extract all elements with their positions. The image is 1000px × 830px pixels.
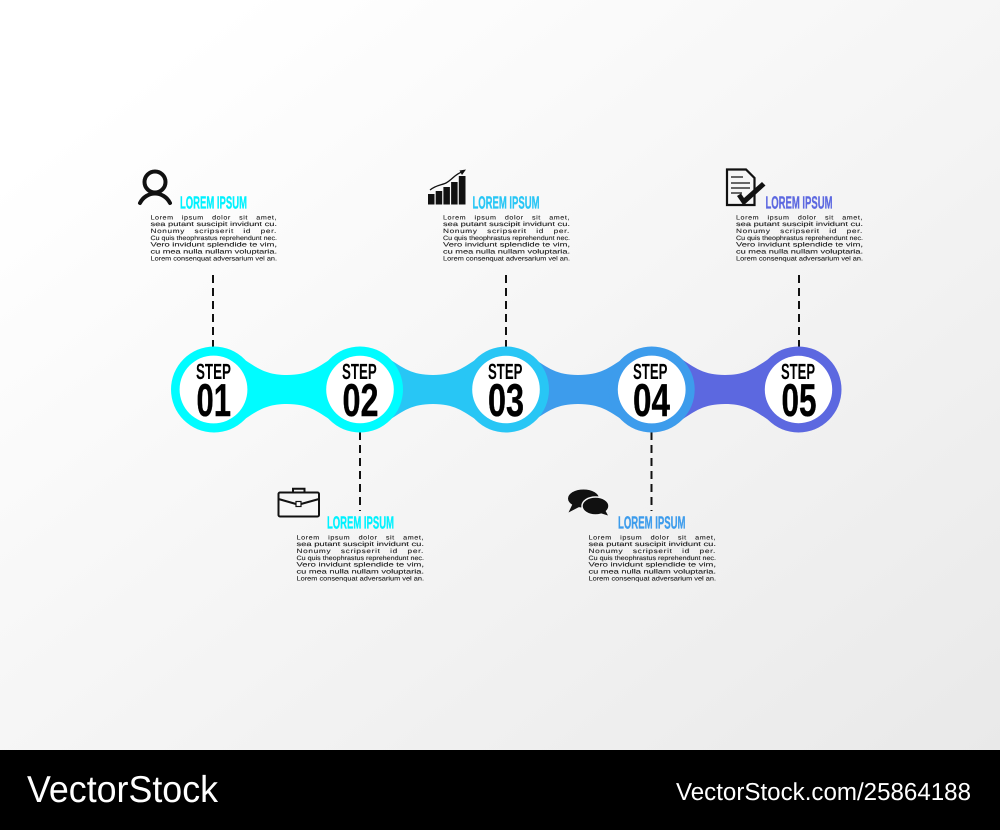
node: step 03 bbox=[388, 346, 549, 432]
icon: bar chart with arrow bbox=[428, 170, 466, 204]
text block: step 02: Lorem consenquat adversarium vel an. bbox=[296, 575, 424, 582]
node: step 02 bbox=[242, 346, 403, 432]
timeline chain bbox=[171, 346, 842, 432]
text block: step 02: cu mea nulla nullam voluptaria. bbox=[296, 568, 424, 576]
text block: step 04: sea putant suscipit invidunt cu. bbox=[588, 541, 716, 548]
text block: step 01: Lorem ipsum dolor sit amet, bbox=[150, 214, 277, 221]
text block: step 03: Lorem ipsum dolor sit amet, bbox=[443, 214, 570, 221]
text block: step 02: Cu quis theophrastus reprehendunt nec. bbox=[296, 555, 424, 562]
text block: step 04: Vero invidunt splendide te vim, bbox=[588, 562, 716, 569]
node: step 01: STEP bbox=[196, 359, 231, 384]
text block: step 04 bbox=[588, 512, 716, 582]
text block: step 05: Vero invidunt splendide te vim, bbox=[736, 242, 863, 249]
text block: step 03: sea putant suscipit invidunt cu. bbox=[443, 221, 570, 228]
footer logo: VectorStock bbox=[27, 768, 218, 810]
text block: step 01: Vero invidunt splendide te vim, bbox=[150, 242, 277, 249]
node: step 03: 03 bbox=[488, 374, 524, 426]
text block: step 02: Lorem ipsum dolor sit amet, bbox=[296, 534, 424, 541]
icon: speech bubbles bbox=[568, 490, 609, 516]
footer bar bbox=[0, 750, 1000, 830]
node: step 03: STEP bbox=[488, 359, 522, 384]
text block: step 03: LOREM IPSUM bbox=[472, 192, 540, 212]
text block: step 02: sea putant suscipit invidunt cu. bbox=[296, 541, 424, 548]
node: step 01: 01 bbox=[196, 374, 231, 426]
text block: step 01: Nonumy scripserit id per. bbox=[150, 228, 277, 235]
icon: document with check bbox=[727, 170, 766, 206]
icon: person bbox=[140, 172, 170, 203]
node: step 04 bbox=[533, 346, 695, 432]
node: step 02: 02 bbox=[342, 374, 378, 426]
text block: step 01 bbox=[150, 192, 277, 262]
text block: step 04: cu mea nulla nullam voluptaria. bbox=[588, 568, 716, 576]
text block: step 05: Lorem consenquat adversarium vel an. bbox=[736, 255, 863, 262]
footer url: VectorStock.com/25864188 bbox=[676, 779, 971, 806]
node: step 05: STEP bbox=[781, 359, 815, 384]
dashed connectors bbox=[213, 275, 799, 511]
text block: step 03: Cu quis theophrastus reprehendunt nec. bbox=[443, 235, 570, 242]
node: step 01 bbox=[171, 346, 257, 432]
text block: step 03: Vero invidunt splendide te vim, bbox=[443, 242, 570, 249]
text block: step 01: cu mea nulla nullam voluptaria. bbox=[150, 248, 277, 256]
text block: step 05 bbox=[736, 192, 863, 262]
text block: step 05: sea putant suscipit invidunt cu. bbox=[736, 221, 863, 228]
text block: step 04: Lorem ipsum dolor sit amet, bbox=[588, 534, 716, 541]
node: step 04: 04 bbox=[633, 374, 670, 426]
node: step 05 bbox=[680, 346, 842, 432]
text block: step 04: Nonumy scripserit id per. bbox=[588, 548, 716, 555]
text block: step 01: Lorem consenquat adversarium vel an. bbox=[150, 255, 277, 262]
text block: step 04: Cu quis theophrastus reprehendunt nec. bbox=[588, 555, 716, 562]
text block: step 05: cu mea nulla nullam voluptaria. bbox=[736, 248, 863, 256]
text block: step 03: Nonumy scripserit id per. bbox=[443, 228, 570, 235]
text block: step 01: sea putant suscipit invidunt cu. bbox=[150, 221, 277, 228]
text block: step 02: Vero invidunt splendide te vim, bbox=[296, 562, 424, 569]
node: step 05: 05 bbox=[782, 374, 816, 426]
text block: step 02 bbox=[296, 512, 424, 582]
text block: step 05: Cu quis theophrastus reprehendunt nec. bbox=[736, 235, 863, 242]
text block: step 03: Lorem consenquat adversarium vel an. bbox=[443, 255, 570, 262]
node: step 02: STEP bbox=[342, 359, 377, 384]
text block: step 05: Nonumy scripserit id per. bbox=[736, 228, 863, 235]
text block: step 02: LOREM IPSUM bbox=[327, 512, 394, 532]
text block: step 01: LOREM IPSUM bbox=[180, 192, 247, 212]
text block: step 05: LOREM IPSUM bbox=[766, 192, 832, 212]
text block: step 05: Lorem ipsum dolor sit amet, bbox=[736, 214, 863, 221]
text block: step 01: Cu quis theophrastus reprehendunt nec. bbox=[150, 235, 277, 242]
text block: step 04: Lorem consenquat adversarium vel an. bbox=[588, 575, 716, 582]
node: step 04: STEP bbox=[633, 359, 668, 384]
text block: step 03 bbox=[443, 192, 570, 262]
text block: step 02: Nonumy scripserit id per. bbox=[296, 548, 424, 555]
text block: step 04: LOREM IPSUM bbox=[618, 512, 686, 532]
text block: step 03: cu mea nulla nullam voluptaria. bbox=[443, 248, 570, 256]
icon: briefcase bbox=[278, 489, 319, 516]
